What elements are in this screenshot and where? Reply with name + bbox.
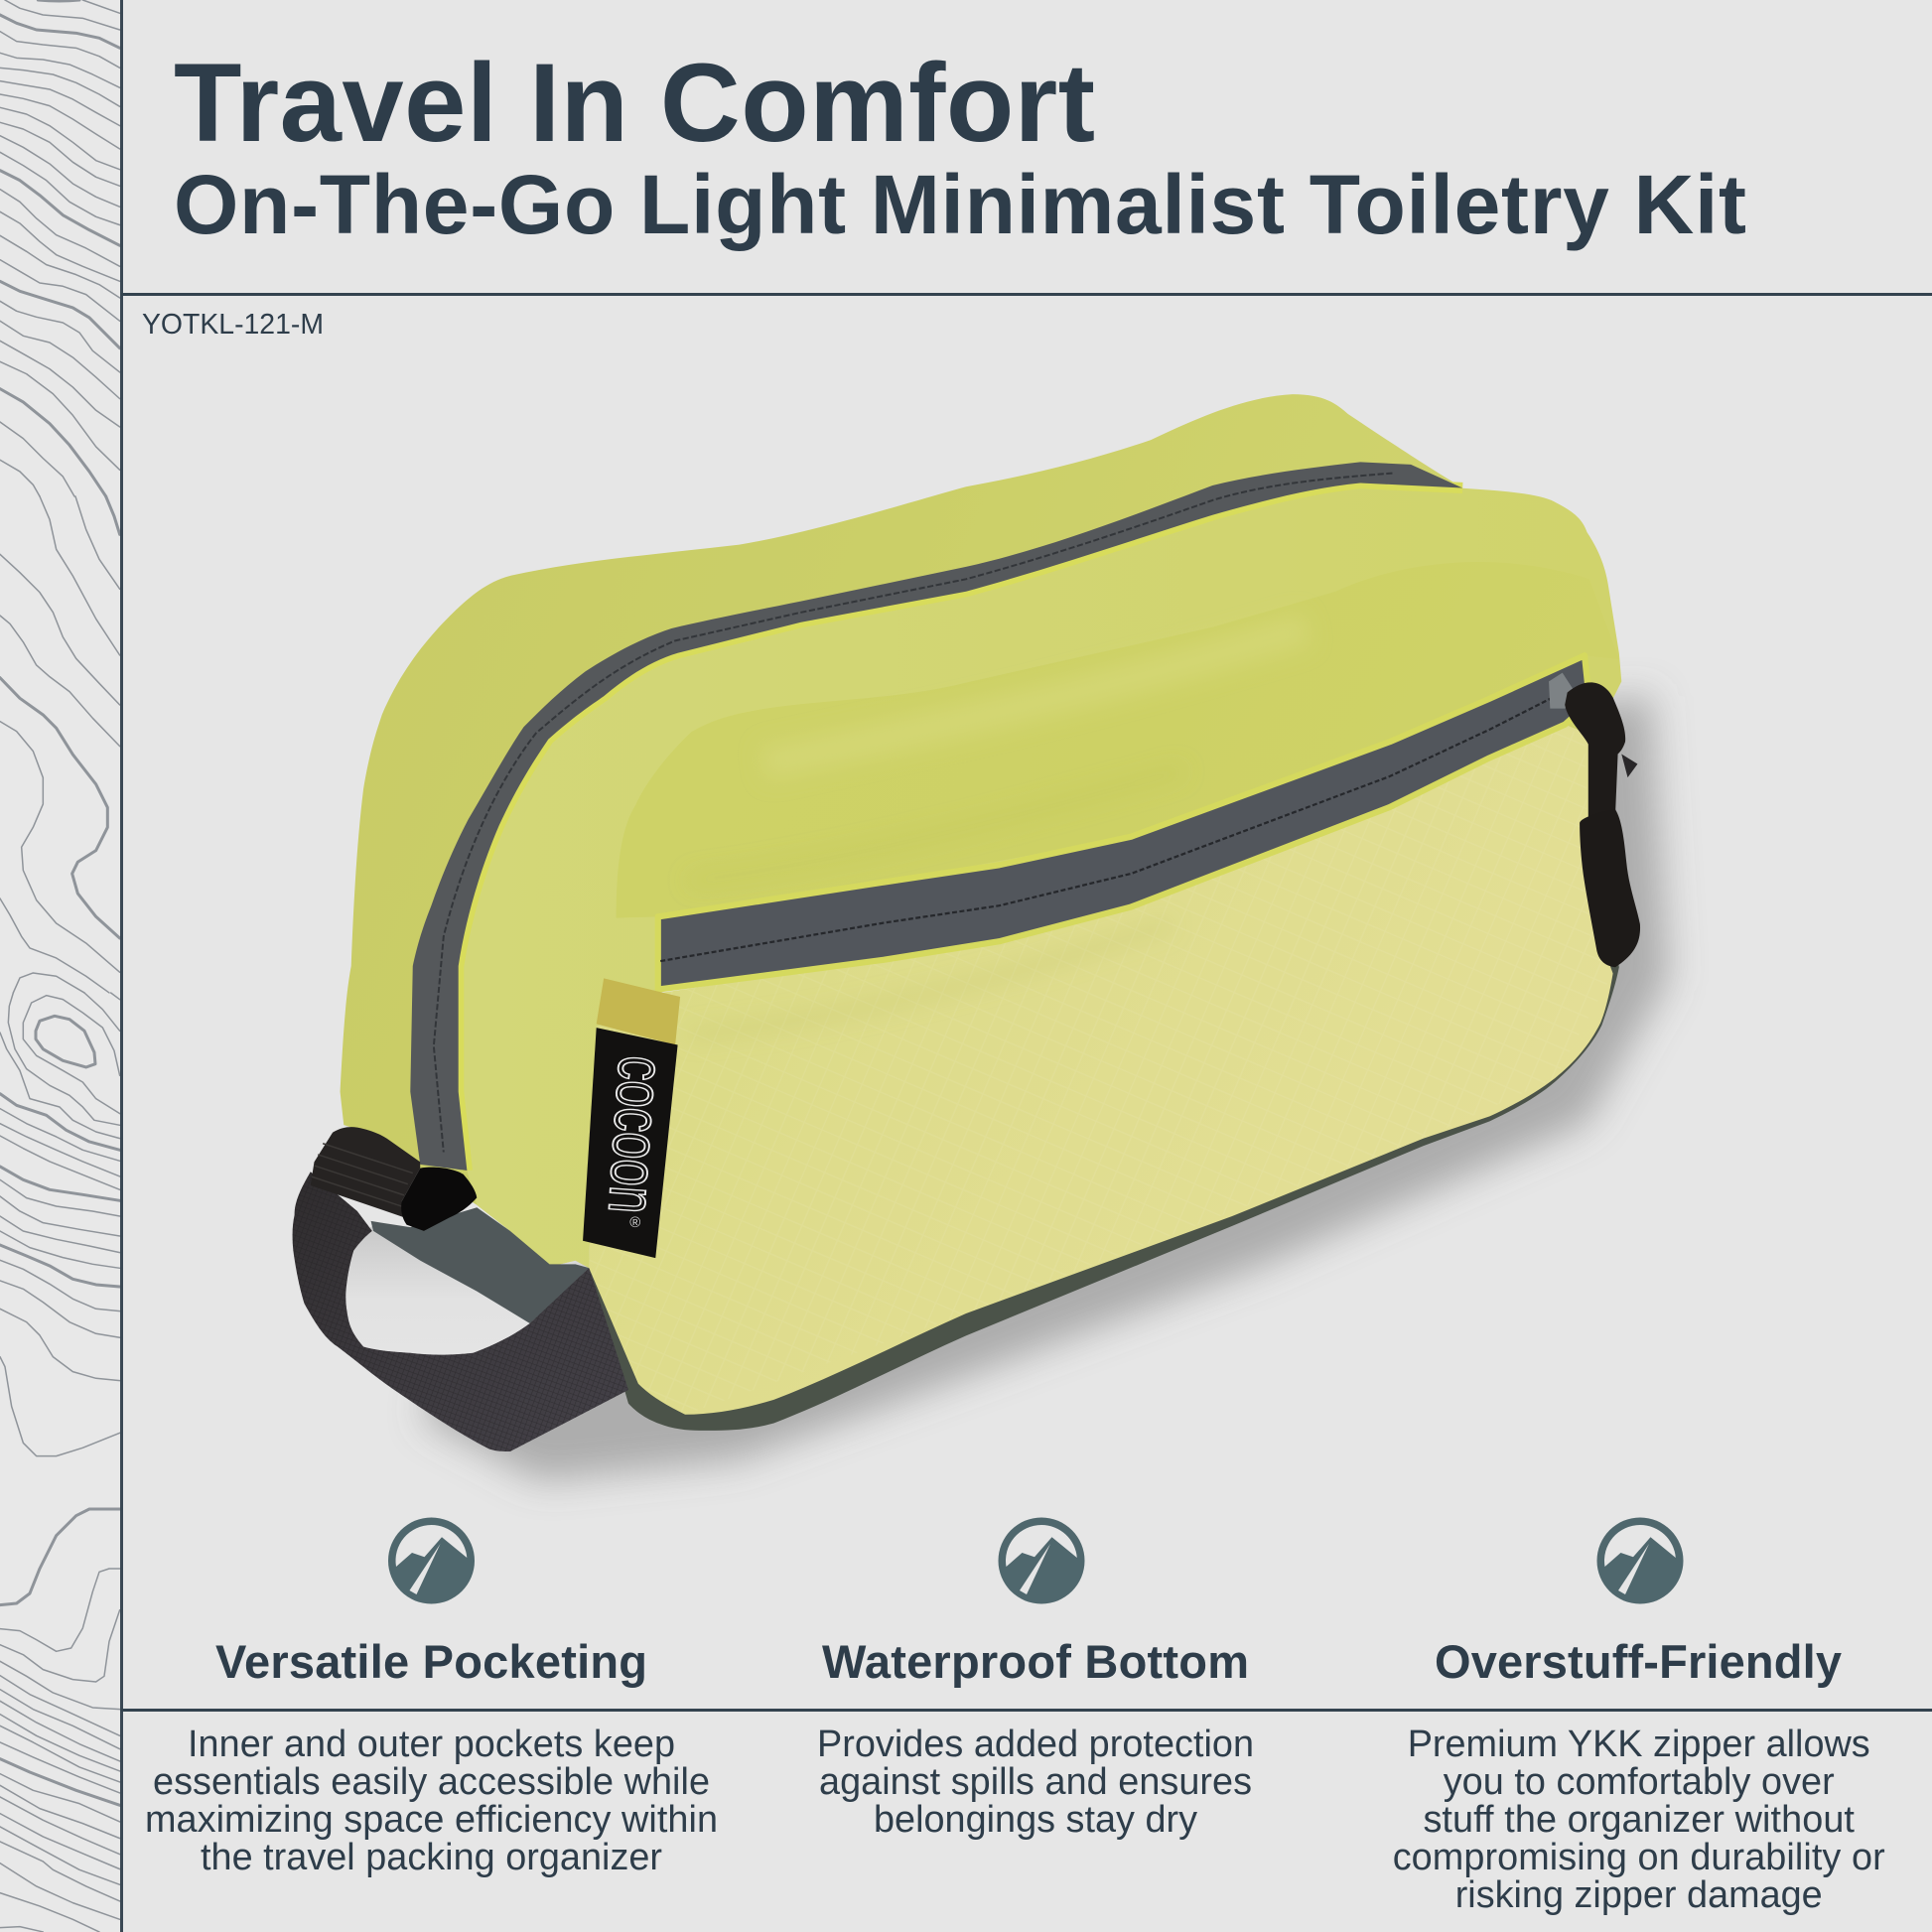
feature text: Overstuff-Friendly: Premium YKK zipper allows xyxy=(1408,1724,1870,1765)
slider opening xyxy=(401,1168,477,1231)
feature text: Versatile Pocketing: maximizing space efficiency within xyxy=(145,1799,718,1841)
registered mark: ® xyxy=(629,1215,640,1231)
slider ribs xyxy=(312,1144,413,1206)
feature text: Overstuff-Friendly: stuff the organizer without xyxy=(1423,1799,1855,1841)
feature heading: Waterproof Bottom: Waterproof Bottom xyxy=(822,1635,1249,1688)
drop shadow xyxy=(424,695,1668,1481)
ribbed slider xyxy=(311,1127,420,1217)
feature text: Waterproof Bottom xyxy=(817,1724,1254,1841)
title: Travel In Comfort xyxy=(174,41,1095,165)
brand name: cocoon xyxy=(594,1053,679,1216)
feature icons xyxy=(388,1517,1684,1604)
zipper pull xyxy=(1565,682,1640,967)
ripstop texture xyxy=(589,725,1613,1415)
panel fold highlights xyxy=(690,628,1307,881)
lower front pocket xyxy=(589,725,1613,1415)
feature text: Overstuff-Friendly: you to comfortably over xyxy=(1444,1761,1835,1803)
icon: mountain badge 1 xyxy=(388,1517,475,1604)
features rule xyxy=(121,1709,1932,1712)
feature text: Versatile Pocketing xyxy=(145,1724,718,1878)
inner upper panel xyxy=(617,562,1619,918)
product photo: toiletry kit xyxy=(293,394,1668,1481)
webbing xyxy=(293,1172,628,1451)
bag body xyxy=(341,394,1619,1431)
feature text: Overstuff-Friendly: risking zipper damage xyxy=(1455,1874,1823,1916)
header rule xyxy=(121,293,1932,296)
feature text: Versatile Pocketing: the travel packing organizer xyxy=(201,1837,662,1878)
black label xyxy=(583,1028,678,1258)
mustard loop xyxy=(597,978,680,1044)
feature text: Waterproof Bottom: against spills and ensures xyxy=(819,1761,1252,1803)
main zipper xyxy=(410,462,1462,1171)
brand tab xyxy=(583,978,680,1258)
feature text: Waterproof Bottom: belongings stay dry xyxy=(874,1799,1197,1841)
icon: mountain badge 2 xyxy=(999,1517,1084,1604)
feature heading: Overstuff-Friendly: Overstuff-Friendly xyxy=(1435,1635,1842,1688)
base patch xyxy=(371,1207,589,1323)
feature text: Versatile Pocketing: Inner and outer pockets keep xyxy=(188,1724,675,1765)
feature text: Waterproof Bottom: Provides added protection xyxy=(817,1724,1254,1765)
pocket shadow streak xyxy=(690,924,1171,1035)
feature text: Overstuff-Friendly: compromising on durability or xyxy=(1393,1837,1885,1878)
pocket zipper xyxy=(658,655,1589,990)
webbing weave xyxy=(293,1172,628,1451)
product code: YOTKL-121-M xyxy=(142,309,324,341)
panel: topographic contour strip xyxy=(0,0,121,1932)
feature text: Overstuff-Friendly xyxy=(1393,1724,1885,1916)
feature heading: Versatile Pocketing: Versatile Pocketing xyxy=(215,1635,647,1688)
handle loop xyxy=(293,1127,628,1451)
handle hole backdrop xyxy=(341,1226,552,1360)
feature text: Versatile Pocketing: essentials easily accessible while xyxy=(153,1761,710,1803)
subtitle: On-The-Go Light Minimalist Toiletry Kit xyxy=(174,158,1746,251)
icon: mountain badge 3 xyxy=(1596,1517,1684,1604)
front frame panel xyxy=(459,483,1621,1268)
vertical rule xyxy=(120,0,123,1932)
